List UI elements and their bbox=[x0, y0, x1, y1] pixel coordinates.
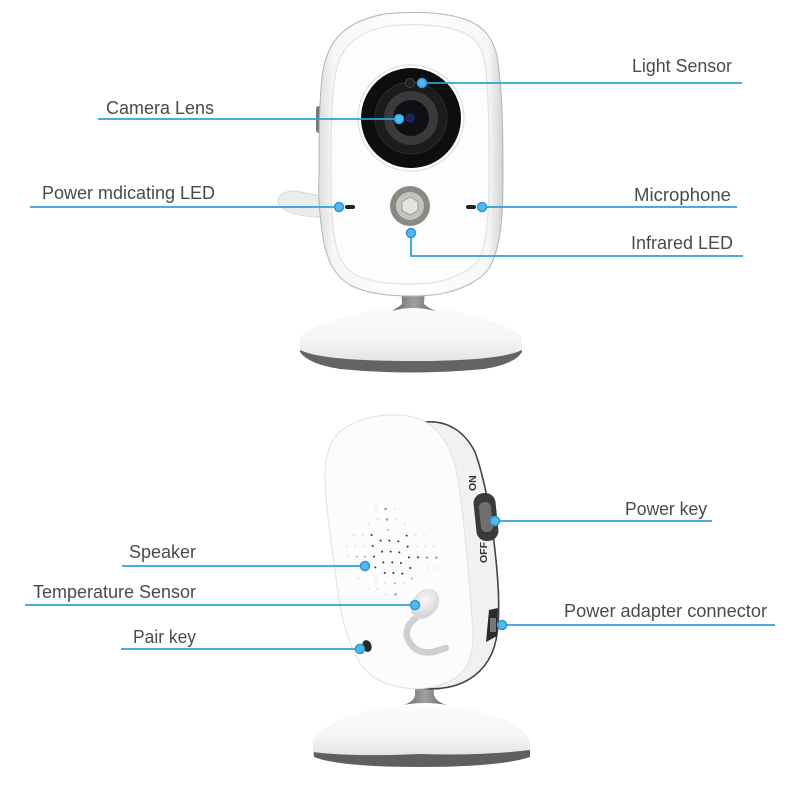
camera lens housing bbox=[358, 65, 464, 171]
pair key bbox=[361, 639, 373, 653]
speaker holes bbox=[346, 508, 438, 596]
label: pair key: Pair key bbox=[133, 627, 196, 647]
back camera base bbox=[313, 678, 530, 767]
label: speaker bbox=[122, 542, 370, 570]
label: light sensor bbox=[418, 56, 742, 88]
front camera base bbox=[300, 275, 522, 372]
adapter connector bbox=[486, 608, 498, 642]
indicator LED slot bbox=[345, 205, 355, 209]
label: temperature sensor bbox=[25, 582, 420, 610]
label: light sensor: Light Sensor bbox=[632, 56, 732, 76]
off label: OFF bbox=[478, 541, 490, 563]
label: pair key bbox=[121, 627, 364, 654]
label: power indicating LED bbox=[30, 183, 344, 212]
label: microphone: Microphone bbox=[634, 185, 731, 205]
front camera illustration bbox=[278, 12, 522, 372]
back camera body bbox=[325, 415, 473, 689]
front camera body bbox=[319, 12, 503, 296]
temperature sensor cable bbox=[406, 584, 446, 652]
label: camera lens bbox=[98, 98, 404, 124]
label: power key: Power key bbox=[625, 499, 707, 519]
microphone slot bbox=[466, 205, 476, 209]
label: infrared LED: Infrared LED bbox=[631, 233, 733, 253]
label: speaker: Speaker bbox=[129, 542, 196, 562]
back camera side edge bbox=[420, 422, 499, 689]
label: power adapter connector: Power adapter connector bbox=[564, 601, 767, 621]
stem collar bbox=[397, 274, 426, 296]
label: power key bbox=[490, 499, 712, 526]
label: camera lens: Camera Lens bbox=[106, 98, 214, 118]
speaker probe behind front camera bbox=[278, 191, 325, 217]
side button bbox=[316, 106, 323, 133]
infrared LED bbox=[390, 186, 430, 226]
on label: ON bbox=[467, 475, 479, 491]
label: temperature sensor: Temperature Sensor bbox=[33, 582, 196, 602]
label: power indicating LED: Power mdicating LED bbox=[42, 183, 215, 203]
power switch bbox=[473, 492, 499, 542]
label: power adapter connector bbox=[498, 601, 775, 630]
label: microphone bbox=[478, 185, 737, 212]
label: infrared LED bbox=[406, 228, 743, 256]
back camera illustration bbox=[313, 415, 530, 767]
